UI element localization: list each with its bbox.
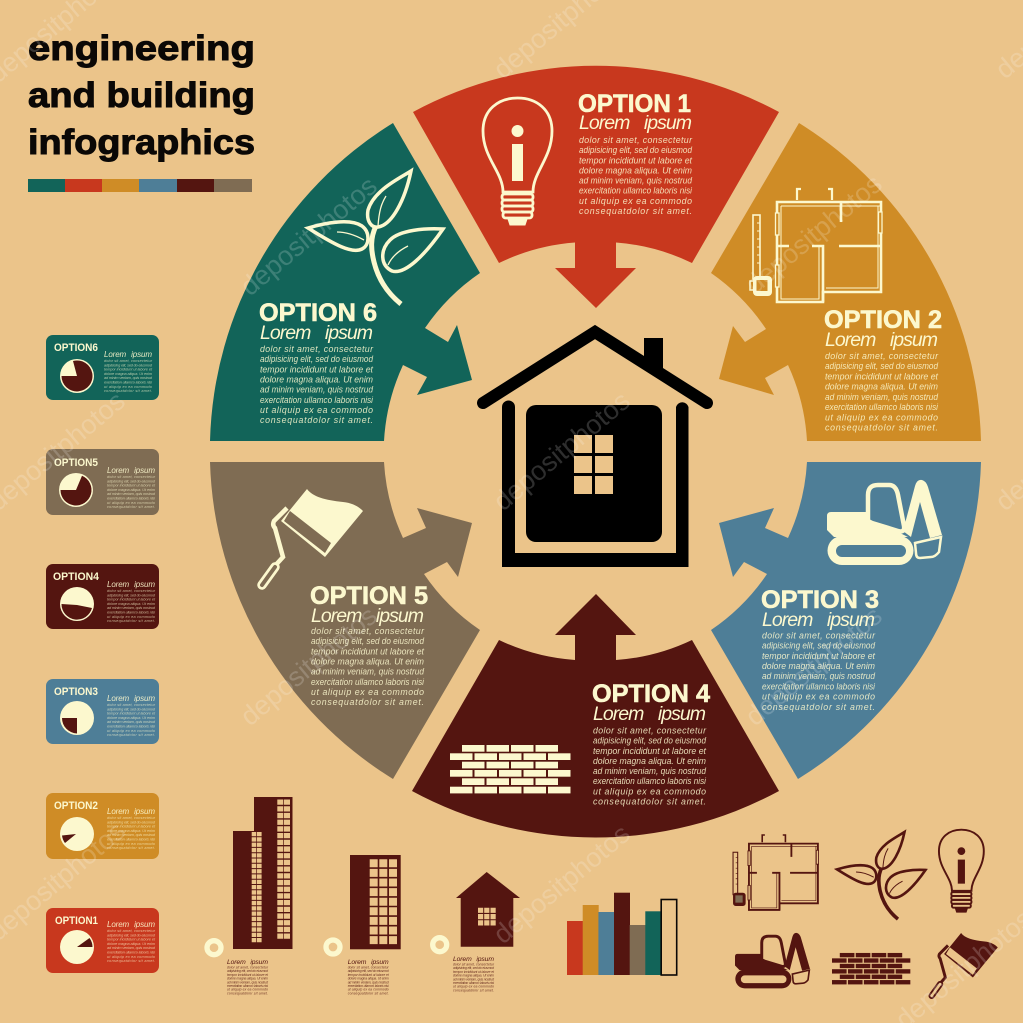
text: option 5: dolor sit amet, consectetur — [311, 626, 425, 636]
card: option 2: tempor incididunt ut labore et — [107, 825, 156, 829]
card: option 3: OPTION3 — [54, 686, 98, 698]
card: option 4: ad minim veniam, quis nostrud — [107, 606, 156, 610]
text: building 1 caption: dolor sit amet, consectetur — [227, 966, 269, 970]
card: option 3: Lorem ipsum — [107, 694, 155, 703]
card: option 1: tempor incididunt ut labore et — [107, 938, 156, 942]
card: option 3: ad minim veniam, quis nostrud — [107, 720, 156, 724]
card: option 1: dolore magna aliqua. Ut enim — [107, 942, 155, 946]
card: option 4: ut aliquip ex ea commodo — [107, 615, 155, 619]
card: option 6: exercitation ullamco laboris nisi — [104, 380, 152, 384]
watermark: depositphotos — [488, 386, 636, 517]
text: option 6: dolore magna aliqua. Ut enim — [260, 374, 373, 384]
card: option 5: tempor incididunt ut labore et — [107, 484, 156, 488]
card: option 2 — [46, 793, 159, 859]
title — [28, 29, 255, 162]
card: option 1 — [46, 908, 159, 973]
card: option 3: exercitation ullamco laboris nisi — [107, 724, 155, 728]
card: option 3: tempor incididunt ut labore et — [107, 712, 156, 716]
card: option 5 — [46, 449, 159, 515]
watermark: depositphotos — [235, 601, 383, 732]
text: option 3: Lorem ipsum — [762, 609, 875, 631]
text: building 1 caption: tempor incididunt ut labore et — [227, 973, 269, 977]
marker rings — [207, 938, 447, 955]
text: house caption: ut aliquip ex ea commodo — [453, 985, 494, 989]
text: option 3: OPTION 3 — [761, 586, 879, 614]
title: engineering — [28, 29, 255, 68]
text: option 5: exercitation ullamco laboris nisi — [311, 677, 425, 687]
text: option 4: ad minim veniam, quis nostrud — [593, 766, 707, 776]
text: house caption: dolore magna aliqua. Ut enim — [453, 974, 494, 978]
text: building 2 caption: exercitation ullamco laboris nisi — [348, 984, 389, 988]
text: option 6: ad minim veniam, quis nostrud — [260, 385, 374, 395]
text: option 1: ad minim veniam, quis nostrud — [579, 176, 693, 186]
panel: option 3 sector — [711, 462, 981, 779]
card: option 2: ut aliquip ex ea commodo — [107, 842, 155, 846]
icon: small excavator — [735, 933, 810, 988]
text: option 2: ut aliquip ex ea commodo — [825, 412, 938, 422]
text: building 2 caption: dolore magna aliqua. Ut enim — [348, 977, 389, 981]
text: building 2 caption: ad minim veniam, quis nostrud — [348, 980, 389, 984]
icon: floor plan — [750, 189, 882, 302]
card: option 6: OPTION6 — [54, 342, 98, 354]
text: building 1 caption: adipisicing elit, sed do eiusmod — [227, 969, 268, 973]
text: option 2: consequatdolor sit amet. — [825, 423, 938, 433]
text: option 6: dolor sit amet, consectetur — [260, 344, 374, 354]
text: option 3: dolore magna aliqua. Ut enim — [762, 661, 875, 671]
text: building 2 caption: tempor incididunt ut labore et — [348, 973, 390, 977]
card: option 2: exercitation ullamco laboris nisi — [107, 838, 155, 842]
pie chart: option 6 — [60, 359, 94, 393]
watermark: depositphotos — [740, 601, 888, 732]
card: option 4: tempor incididunt ut labore et — [107, 598, 156, 602]
card: option 3 — [46, 679, 159, 744]
card: option 4: adipisicing elit, sed do eiusmod — [107, 593, 156, 597]
panel: option 1 sector — [413, 66, 779, 308]
pie chart: option 3 — [60, 701, 94, 735]
card: option 4: consequatdolor sit amet. — [107, 619, 155, 623]
icon: leaves — [308, 171, 443, 304]
text: building 1 caption: Lorem ipsum — [227, 959, 268, 966]
text: option 1: exercitation ullamco laboris nisi — [579, 186, 693, 196]
text: option 5: Lorem ipsum — [311, 605, 424, 627]
text: option 3: consequatdolor sit amet. — [762, 702, 875, 712]
text: option 2: tempor incididunt ut labore et — [825, 371, 939, 381]
card: option 4: dolore magna aliqua. Ut enim — [107, 602, 155, 606]
card: option 5: dolore magna aliqua. Ut enim — [107, 488, 155, 492]
text: building 2 caption — [348, 959, 390, 995]
text: option 3: ut aliquip ex ea commodo — [762, 692, 875, 702]
watermark: depositphotos — [488, 819, 636, 950]
text: option 4 — [592, 680, 710, 806]
card: option 6 — [46, 335, 159, 400]
title: infographics — [28, 123, 255, 162]
icon: paint roller — [262, 489, 363, 585]
text: option 4: dolor sit amet, consectetur — [593, 726, 707, 736]
card: option 2: adipisicing elit, sed do eiusmod — [107, 820, 156, 824]
colour strip — [28, 179, 252, 192]
text: option 5: ut aliquip ex ea commodo — [311, 687, 424, 697]
text: option 2: ad minim veniam, quis nostrud — [825, 392, 939, 402]
text: house caption: adipisicing elit, sed do eiusmod — [453, 966, 494, 970]
card: option 5: adipisicing elit, sed do eiusmod — [107, 479, 156, 483]
text: option 3: tempor incididunt ut labore et — [762, 651, 876, 661]
pie chart: option 4 — [60, 587, 94, 621]
icon: small house — [456, 872, 520, 947]
text: option 2: dolore magna aliqua. Ut enim — [825, 382, 938, 392]
text: building 2 caption: consequatdolor sit amet. — [348, 991, 389, 995]
panel: option 4 sector — [412, 594, 779, 837]
card: option 4: dolor sit amet, consectetur — [107, 589, 156, 593]
text: option 3: exercitation ullamco laboris nisi — [762, 681, 876, 691]
text: house caption: ad minim veniam, quis nostrud — [453, 977, 494, 981]
card: option 1: ut aliquip ex ea commodo — [107, 955, 155, 959]
text: option 6: consequatdolor sit amet. — [260, 415, 373, 425]
card: option 3: adipisicing elit, sed do eiusmod — [107, 707, 156, 711]
text: house caption: tempor incididunt ut labore et — [453, 970, 495, 974]
text: building 2 caption: Lorem ipsum — [348, 959, 389, 966]
panel: option 5 sector — [210, 462, 480, 779]
icon: twin tower buildings — [233, 797, 292, 949]
card: option 5: exercitation ullamco laboris nisi — [107, 496, 155, 500]
card: option 1: Lorem ipsum — [107, 920, 155, 929]
text: option 4: tempor incididunt ut labore et — [593, 746, 707, 756]
panel: option 2 sector — [711, 123, 981, 441]
text: option 4: exercitation ullamco laboris nisi — [593, 776, 707, 786]
text: option 3 — [761, 586, 879, 712]
icon: small paint roller — [932, 933, 998, 996]
text: option 5: dolore magna aliqua. Ut enim — [311, 656, 424, 666]
text: option 1: dolor sit amet, consectetur — [579, 135, 693, 145]
card: option 5: dolor sit amet, consectetur — [107, 475, 156, 479]
icon: apartment block — [350, 855, 401, 949]
text: option 6: OPTION 6 — [259, 299, 377, 327]
watermark: depositphotos — [740, 169, 888, 300]
text: house caption: consequatdolor sit amet. — [453, 988, 494, 992]
text: building 2 caption: dolor sit amet, consectetur — [348, 966, 390, 970]
text: option 4: OPTION 4 — [592, 680, 710, 708]
text: house caption — [453, 956, 495, 992]
text: option 6: exercitation ullamco laboris nisi — [260, 395, 374, 405]
text: option 3: dolor sit amet, consectetur — [762, 630, 876, 640]
card: option 6: Lorem ipsum — [104, 350, 152, 359]
text: option 1 — [578, 90, 693, 216]
icon: brick wall — [450, 745, 570, 793]
pie chart: option 2 — [60, 817, 94, 851]
card: option 4: Lorem ipsum — [107, 580, 155, 589]
text: building 1 caption: consequatdolor sit amet. — [227, 991, 268, 995]
card: option 5: consequatdolor sit amet. — [107, 505, 155, 509]
text: house caption: Lorem ipsum — [453, 956, 494, 963]
card: option 5: ut aliquip ex ea commodo — [107, 501, 155, 505]
text: option 2 — [824, 306, 942, 433]
pie chart: option 5 — [59, 473, 93, 507]
card: option 6: ut aliquip ex ea commodo — [104, 385, 152, 389]
text: option 5 — [310, 582, 428, 707]
text: building 1 caption: dolore magna aliqua. Ut enim — [227, 977, 268, 981]
text: option 1: tempor incididunt ut labore et — [579, 155, 693, 165]
text: building 1 caption — [227, 959, 269, 995]
text: option 6: ut aliquip ex ea commodo — [260, 405, 373, 415]
text: option 1: consequatdolor sit amet. — [579, 206, 692, 216]
icon: small leaves — [837, 832, 925, 919]
pie chart: option 1 — [60, 930, 94, 964]
card: option 4: OPTION4 — [53, 571, 100, 583]
title: and building — [28, 76, 255, 115]
text: option 4: Lorem ipsum — [593, 703, 706, 725]
text: option 6: adipisicing elit, sed do eiusmod — [260, 354, 374, 364]
text: option 5: OPTION 5 — [310, 582, 428, 610]
text: house caption: dolor sit amet, consectetur — [453, 962, 495, 966]
card: option 3: dolor sit amet, consectetur — [107, 703, 156, 707]
card: option 6: dolore magna aliqua. Ut enim — [104, 372, 152, 376]
text: option 1: OPTION 1 — [578, 90, 691, 118]
text: house caption: exercitation ullamco laboris nisi — [453, 981, 494, 985]
card: option 2: dolor sit amet, consectetur — [107, 816, 156, 820]
card: option 2: Lorem ipsum — [107, 807, 155, 816]
text: option 3: adipisicing elit, sed do eiusmod — [762, 641, 876, 651]
card: option 1: ad minim veniam, quis nostrud — [107, 946, 156, 950]
text: option 5: ad minim veniam, quis nostrud — [311, 667, 425, 677]
card: option 6: tempor incididunt ut labore et — [104, 368, 153, 372]
text: option 1: dolore magna aliqua. Ut enim — [579, 165, 692, 175]
card: option 3: consequatdolor sit amet. — [107, 733, 155, 737]
text: option 4: consequatdolor sit amet. — [593, 796, 706, 806]
icon: small floor plan — [733, 835, 819, 910]
text: option 2: dolor sit amet, consectetur — [825, 351, 939, 361]
watermark: depositphotos — [235, 171, 383, 302]
card: option 4: exercitation ullamco laboris nisi — [107, 610, 155, 614]
text: option 4: adipisicing elit, sed do eiusmod — [593, 736, 707, 746]
card: option 3: ut aliquip ex ea commodo — [107, 729, 155, 733]
text: option 3: ad minim veniam, quis nostrud — [762, 671, 876, 681]
text: option 2: exercitation ullamco laboris nisi — [825, 402, 939, 412]
text: option 2: adipisicing elit, sed do eiusmod — [825, 361, 939, 371]
icon: small light bulb — [939, 830, 984, 912]
card: option 6: dolor sit amet, consectetur — [104, 359, 153, 363]
card: option 2: ad minim veniam, quis nostrud — [107, 833, 156, 837]
text: option 5: tempor incididunt ut labore et — [311, 646, 425, 656]
card: option 2: consequatdolor sit amet. — [107, 846, 155, 850]
card: option 5: ad minim veniam, quis nostrud — [107, 492, 156, 496]
text: option 5: adipisicing elit, sed do eiusmod — [311, 636, 425, 646]
card: option 1: dolor sit amet, consectetur — [107, 929, 156, 933]
card: option 6: ad minim veniam, quis nostrud — [104, 376, 153, 380]
card: option 1: exercitation ullamco laboris nisi — [107, 950, 155, 954]
card: option 1: adipisicing elit, sed do eiusmod — [107, 933, 156, 937]
card: option 1: OPTION1 — [55, 915, 98, 927]
card: option 3: dolore magna aliqua. Ut enim — [107, 716, 155, 720]
card: option 6: adipisicing elit, sed do eiusmod — [104, 363, 153, 367]
bar chart — [567, 893, 677, 975]
text: option 4: ut aliquip ex ea commodo — [593, 786, 706, 796]
text: building 2 caption: adipisicing elit, sed do eiusmod — [348, 969, 389, 973]
text: building 2 caption: ut aliquip ex ea commodo — [348, 988, 389, 992]
text: option 2: OPTION 2 — [824, 306, 942, 334]
card: option 5: Lorem ipsum — [107, 466, 155, 475]
text: option 6: Lorem ipsum — [260, 322, 373, 344]
text: building 1 caption: ad minim veniam, quis nostrud — [227, 980, 268, 984]
card: option 6: consequatdolor sit amet. — [104, 389, 152, 393]
text: option 2: Lorem ipsum — [825, 329, 938, 351]
text: building 1 caption: ut aliquip ex ea commodo — [227, 988, 268, 992]
text: option 6: tempor incididunt ut labore et — [260, 364, 374, 374]
card: option 1: consequatdolor sit amet. — [107, 959, 155, 963]
icon: light bulb — [483, 98, 552, 225]
text: option 1: adipisicing elit, sed do eiusmod — [579, 145, 693, 155]
card: option 2: OPTION2 — [54, 800, 98, 812]
text: option 5: consequatdolor sit amet. — [311, 697, 424, 707]
text: option 6 — [259, 299, 377, 425]
card: option 2: dolore magna aliqua. Ut enim — [107, 829, 155, 833]
icon: small brick wall — [832, 953, 910, 984]
card: option 5: OPTION5 — [54, 457, 98, 469]
icon: excavator — [827, 480, 942, 565]
text: option 4: dolore magna aliqua. Ut enim — [593, 756, 706, 766]
icon: central house — [483, 332, 707, 567]
panel: option 6 sector — [210, 123, 480, 441]
text: option 1: Lorem ipsum — [579, 112, 692, 134]
card: option 4 — [46, 564, 159, 629]
text: building 1 caption: exercitation ullamco laboris nisi — [227, 984, 268, 988]
text: option 1: ut aliquip ex ea commodo — [579, 196, 692, 206]
